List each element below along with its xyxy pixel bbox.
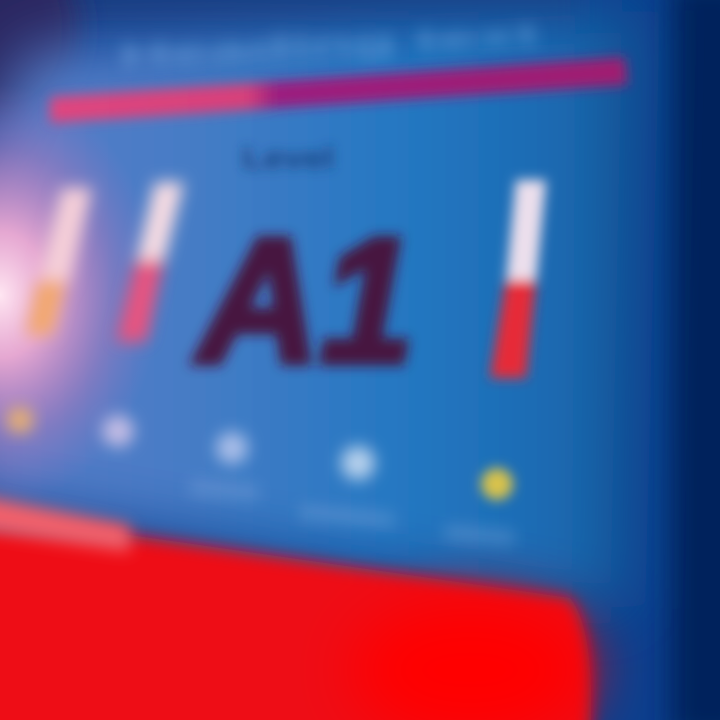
gauge 1 xyxy=(26,188,92,335)
panel: blue screen xyxy=(0,10,640,610)
icon: dot 5 xyxy=(481,468,513,500)
red banner xyxy=(0,495,591,720)
large letters: A1: A1 xyxy=(194,201,414,400)
progress bar xyxy=(50,57,628,123)
captions xyxy=(189,480,515,545)
heading: blurred title: Heading text xyxy=(119,18,540,73)
glow: pink light flare xyxy=(0,85,160,505)
subheading: small dark label: Level xyxy=(242,142,334,175)
icon: dot 1 xyxy=(7,407,33,433)
icon: dot 4 xyxy=(341,446,375,480)
gauge 2 xyxy=(116,182,184,342)
icon: dot 2 xyxy=(102,415,134,447)
gauge 3 xyxy=(490,180,546,378)
icon: dot 3 xyxy=(216,432,248,464)
